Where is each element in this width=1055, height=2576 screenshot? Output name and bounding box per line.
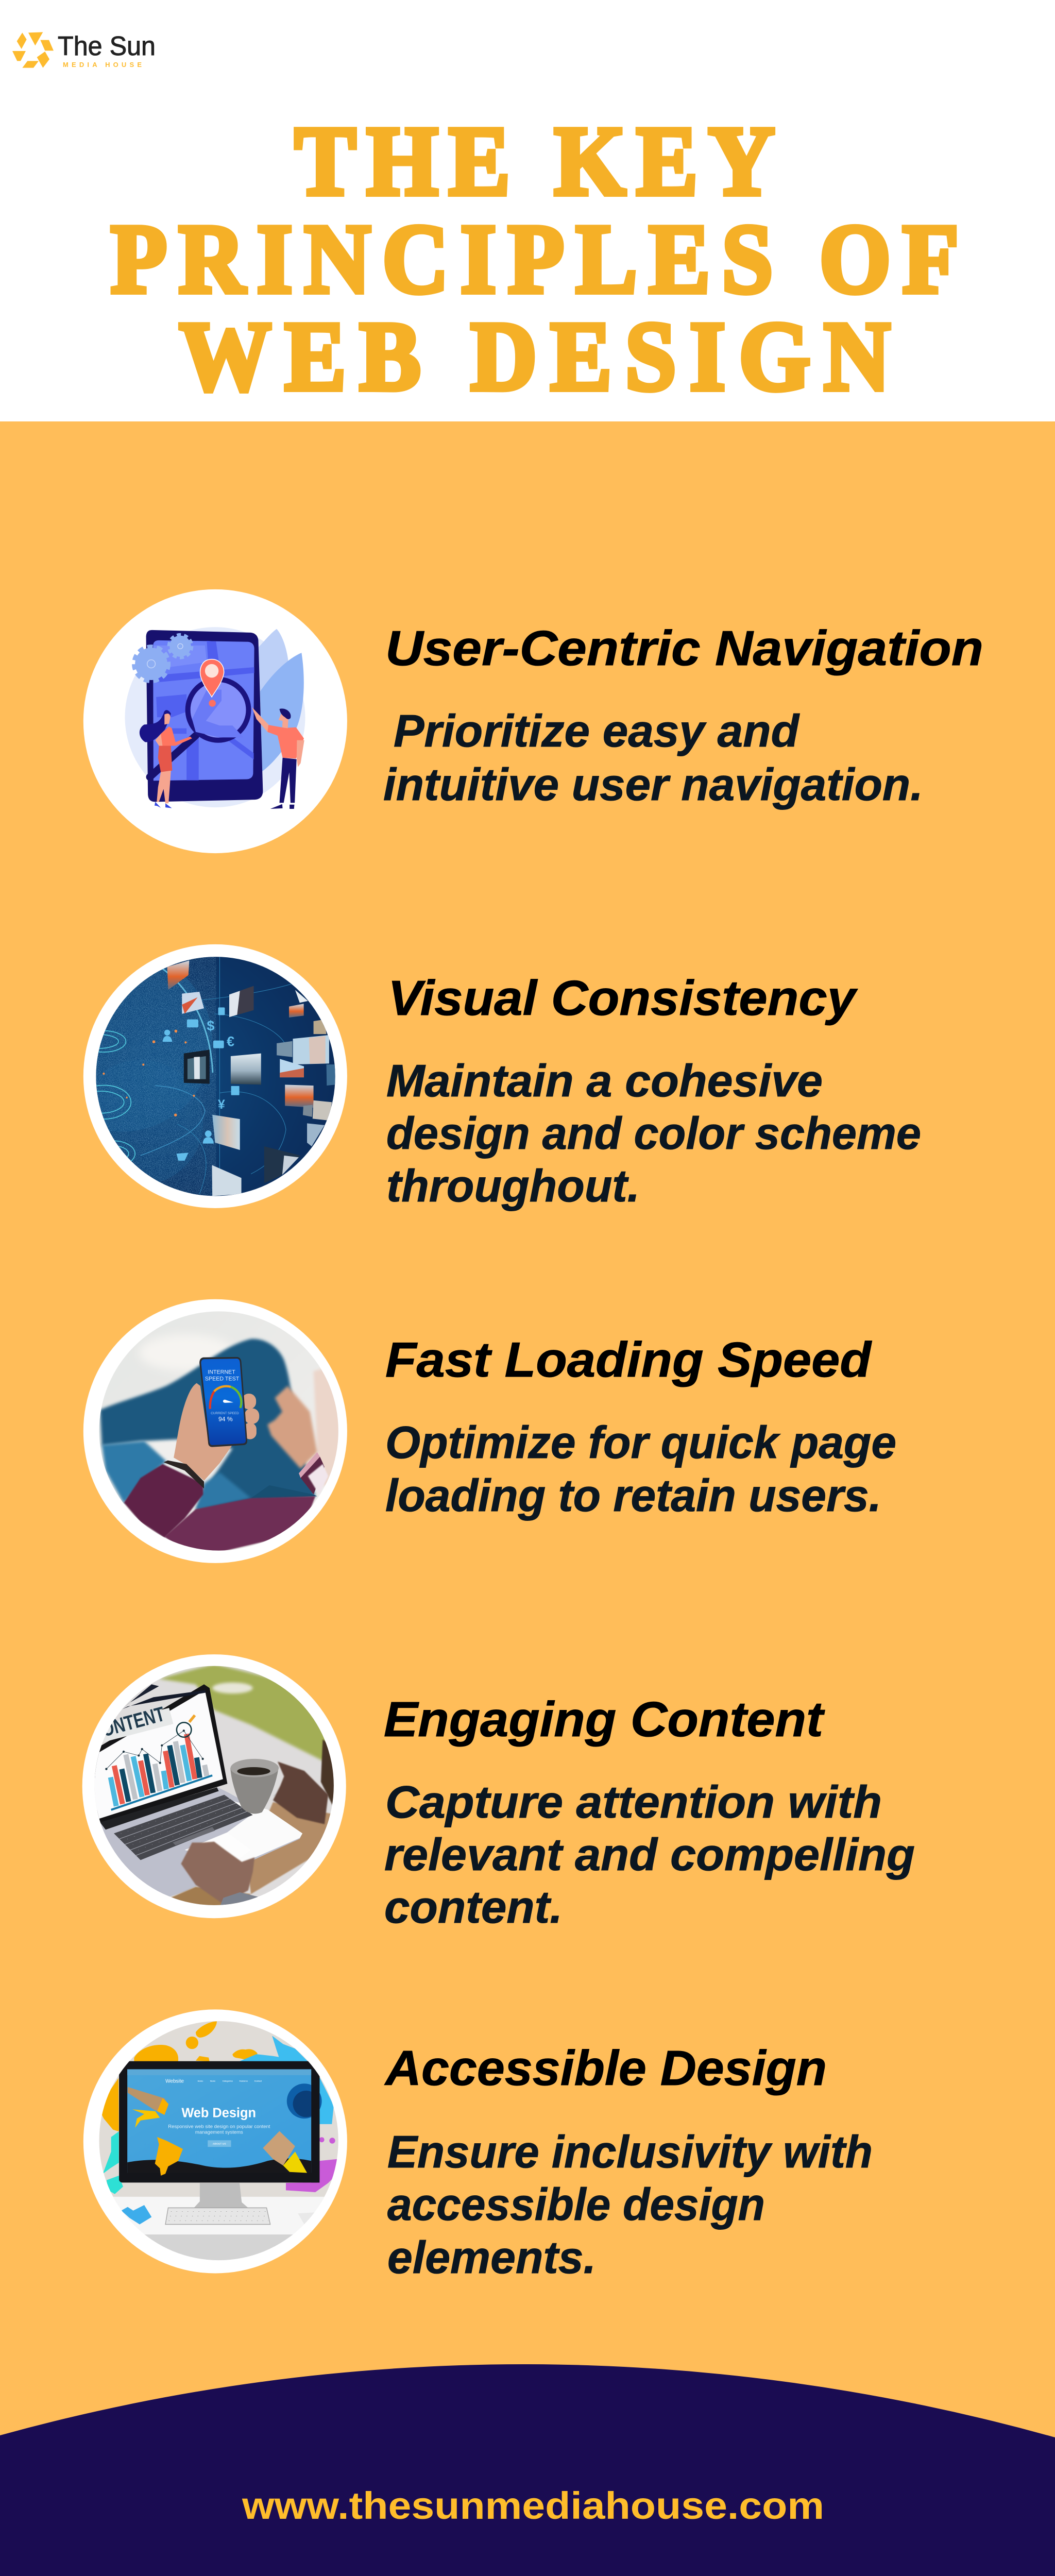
body: Engaging Content: Capture attention with [385,1776,882,1827]
body: Engaging Content: relevant and compelling [384,1829,915,1880]
icon: floating symbols: $ [207,1018,215,1033]
desk [113,2197,325,2234]
hand on trackpad [181,1842,254,1904]
body: User-Centric Navigation [383,705,923,810]
body: Accessible Design: accessible design [387,2179,765,2230]
body: User-Centric Navigation: Prioritize easy and [394,705,800,756]
icon: gears [134,635,192,681]
title: WEB DESIGN [179,302,890,411]
icon: floating symbols: ¥ [218,1097,225,1112]
icon: sun logo mark [12,32,54,68]
icon: floating symbols: € [227,1033,234,1049]
body: Visual Consistency: throughout. [386,1160,640,1211]
icon: phone speed test photo [83,1299,347,1563]
body: Fast Loading Speed [385,1417,896,1521]
logo wordmark: The Sun [58,31,156,61]
heading: Visual Consistency: Visual Consistency [388,971,858,1026]
figure: man [252,707,304,809]
title: PRINCIPLES OF [111,205,959,314]
heading: Fast Loading Speed: Fast Loading Speed [385,1332,872,1387]
body: Engaging Content: content. [384,1882,563,1933]
icon: digital network photo [83,944,347,1208]
hand holding cup [273,1761,328,1824]
monitor: management systems [195,2129,243,2135]
footer website url: www.thesunmediahouse.com [242,2484,824,2527]
title [111,107,959,411]
heading: Accessible Design: Accessible Design [384,2041,827,2096]
body: Visual Consistency: design and color scheme [386,1108,921,1159]
keyboard [165,2208,270,2224]
monitor [119,2061,322,2182]
body: Engaging Content [384,1776,915,1933]
icon: magnifying glass [150,680,248,777]
icon: floating symbols [163,1007,240,1161]
body: Fast Loading Speed: loading to retain users. [385,1470,881,1521]
monitor: Categories [223,2079,233,2082]
phone with speed test screen: CURRENT SPEED [211,1412,239,1415]
monitor: Responsive web site design on popular content [168,2124,270,2130]
phone with speed test screen [199,1357,247,1447]
body: Accessible Design [387,2126,873,2283]
monitor: Web Design [181,2106,256,2121]
main orange panel [0,421,1055,2482]
icon: navigation illustration [83,589,347,853]
title: THE KEY [295,107,775,216]
phone with speed test screen: SPEED TEST [205,1376,240,1382]
body: Fast Loading Speed: Optimize for quick page [385,1417,896,1468]
icon: web design monitor photo [83,2009,347,2273]
hand holding phone [174,1383,259,1481]
phone with speed test screen: INTERNET [208,1369,235,1375]
logo tagline: MEDIA HOUSE [63,61,142,69]
phone with speed test screen: 94 % [218,1416,233,1423]
monitor: Website [165,2078,184,2084]
bar chart [111,1734,207,1806]
monitor: ABOUT US [213,2142,226,2145]
splat and brushes on screen [155,2137,183,2176]
heading: Engaging Content: Engaging Content [384,1692,825,1747]
monitor: Home [198,2079,203,2082]
body: Visual Consistency [386,1055,921,1211]
laptop screen [93,1684,227,1824]
laptop base and keyboard [98,1787,302,1909]
monitor: Features [240,2079,248,2082]
laptop screen: ONTENT [99,1703,167,1741]
paint splats [98,2022,337,2194]
monitor stand [194,2183,248,2208]
body: Accessible Design: Ensure inclusivity with [387,2126,873,2177]
body: User-Centric Navigation: intuitive user navigation. [383,759,923,810]
other hand [267,1386,317,1469]
body: Accessible Design: elements. [387,2232,596,2283]
coffee cup [230,1759,279,1814]
heading: User-Centric Navigation: User-Centric Navigation [385,621,983,676]
monitor: News [210,2079,216,2082]
body: Visual Consistency: Maintain a cohesive [386,1055,823,1106]
monitor: Contact [254,2079,262,2082]
logo: The Sun Media House [12,31,156,69]
icon: laptop content photo [82,1654,346,1918]
header background [0,0,1055,421]
figure: woman [140,710,192,808]
footer panel [0,2364,1055,2576]
icon: map pin [200,659,224,707]
